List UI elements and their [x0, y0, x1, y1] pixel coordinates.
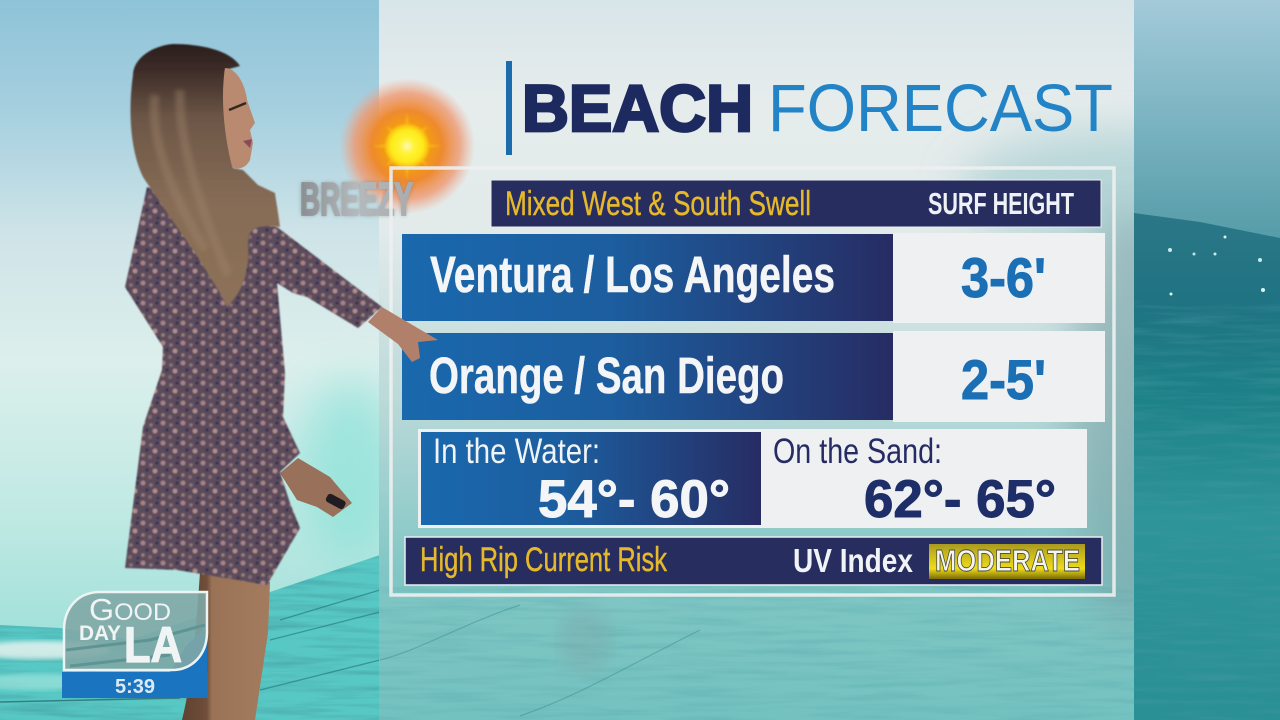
temperature panels: [418, 429, 1087, 529]
title: [506, 61, 1113, 155]
in the water: 54°- 60°: [538, 470, 730, 529]
breezy label: BREEZY: [300, 173, 413, 225]
breezy label: BREEZY: [300, 173, 413, 225]
on the sand: [773, 432, 1056, 529]
row: Ventura / Los Angeles: [402, 233, 1105, 323]
row: Orange / San Diego: 2-5': [961, 348, 1046, 411]
in the water: [421, 432, 761, 529]
breezy label: [300, 173, 413, 225]
Good Day LA logo and clock: 5:39: [115, 676, 155, 698]
in the water: In the Water:: [433, 432, 600, 471]
row: Orange / San Diego: Orange / San Diego: [429, 347, 784, 404]
Good Day LA logo and clock: GOOD: [89, 592, 171, 627]
on the sand: 62°- 65°: [864, 470, 1056, 529]
turquoise spray: [300, 380, 400, 560]
presenter pointing hand: [368, 307, 438, 362]
swell header bar: SURF HEIGHT: [928, 186, 1074, 221]
center panel backdrop: [379, 0, 1134, 720]
on the sand: On the Sand:: [773, 432, 942, 471]
title: BEACH: [522, 71, 753, 145]
row: Ventura / Los Angeles: Ventura / Los Angeles: [430, 246, 835, 303]
face: [223, 68, 255, 168]
Good Day LA logo and clock: [62, 592, 208, 698]
Good Day LA logo and clock: LA: [124, 617, 182, 673]
hair: [130, 44, 280, 307]
sun icon with orange glow: [339, 78, 475, 214]
forecast panel frame: [391, 168, 1114, 595]
presenter: [125, 44, 382, 720]
legs: [182, 572, 270, 720]
left wave water: [0, 550, 380, 720]
rip current and UV bar: [405, 537, 1102, 585]
rip current and UV bar: UV Index: [793, 542, 914, 579]
UV badge: MODERATE: [935, 543, 1080, 578]
swell header bar: Mixed West & South Swell: [505, 185, 811, 223]
Good Day LA logo and clock: DAY: [79, 622, 121, 645]
lower hand holding clicker: [280, 458, 352, 517]
title: FORECAST: [768, 71, 1113, 146]
right side sky and sea: [1134, 0, 1280, 720]
row: Orange / San Diego: [402, 331, 1105, 422]
rip current and UV bar: High Rip Current Risk: [420, 541, 668, 579]
swell header bar: [491, 180, 1101, 227]
row: Ventura / Los Angeles: 3-6': [961, 246, 1046, 309]
dress and arms: [125, 187, 382, 585]
